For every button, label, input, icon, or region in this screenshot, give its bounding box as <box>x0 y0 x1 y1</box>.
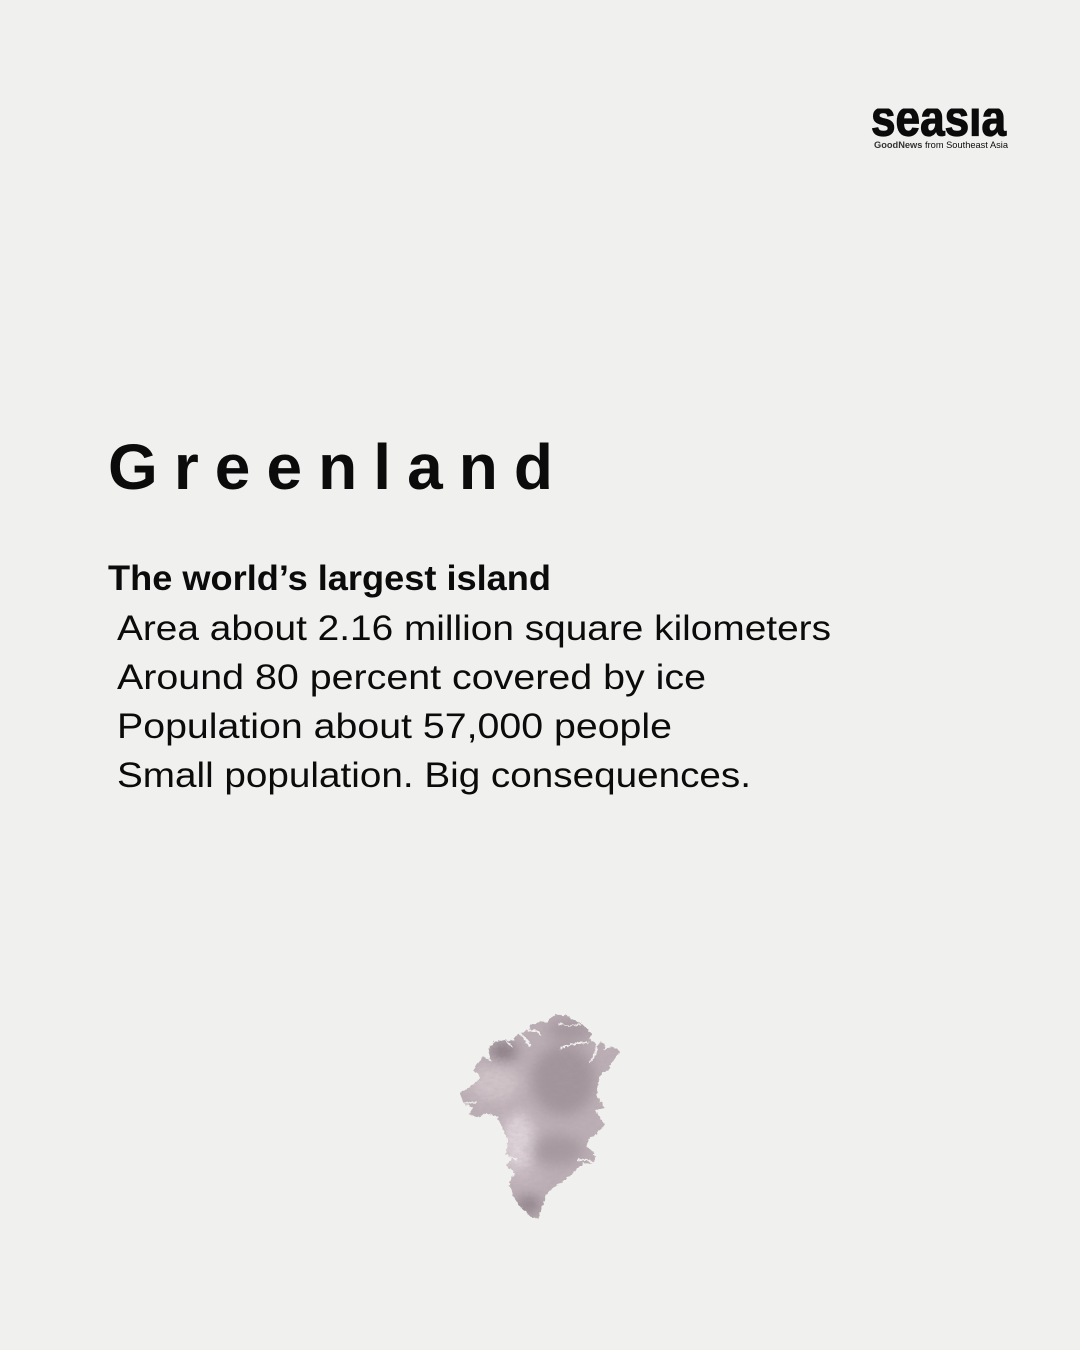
subheading: The world’s largest island <box>108 559 551 598</box>
fjords <box>464 1023 597 1163</box>
logo wordmark: seasia <box>871 90 1007 146</box>
fact: ice cover: Around 80 percent covered by ice <box>117 658 706 697</box>
fact: area: Area about 2.16 million square kilometers <box>117 609 831 648</box>
logo tagline: GoodNews from Southeast Asia <box>874 140 1009 151</box>
title: Greenland <box>108 431 553 503</box>
logo: seasia <box>872 108 1008 148</box>
map: Greenland watercolor silhouette <box>460 1014 620 1219</box>
fact: population: Population about 57,000 people <box>117 707 672 746</box>
fact list <box>108 559 831 795</box>
fact: consequences: Small population. Big consequences. <box>117 756 751 795</box>
